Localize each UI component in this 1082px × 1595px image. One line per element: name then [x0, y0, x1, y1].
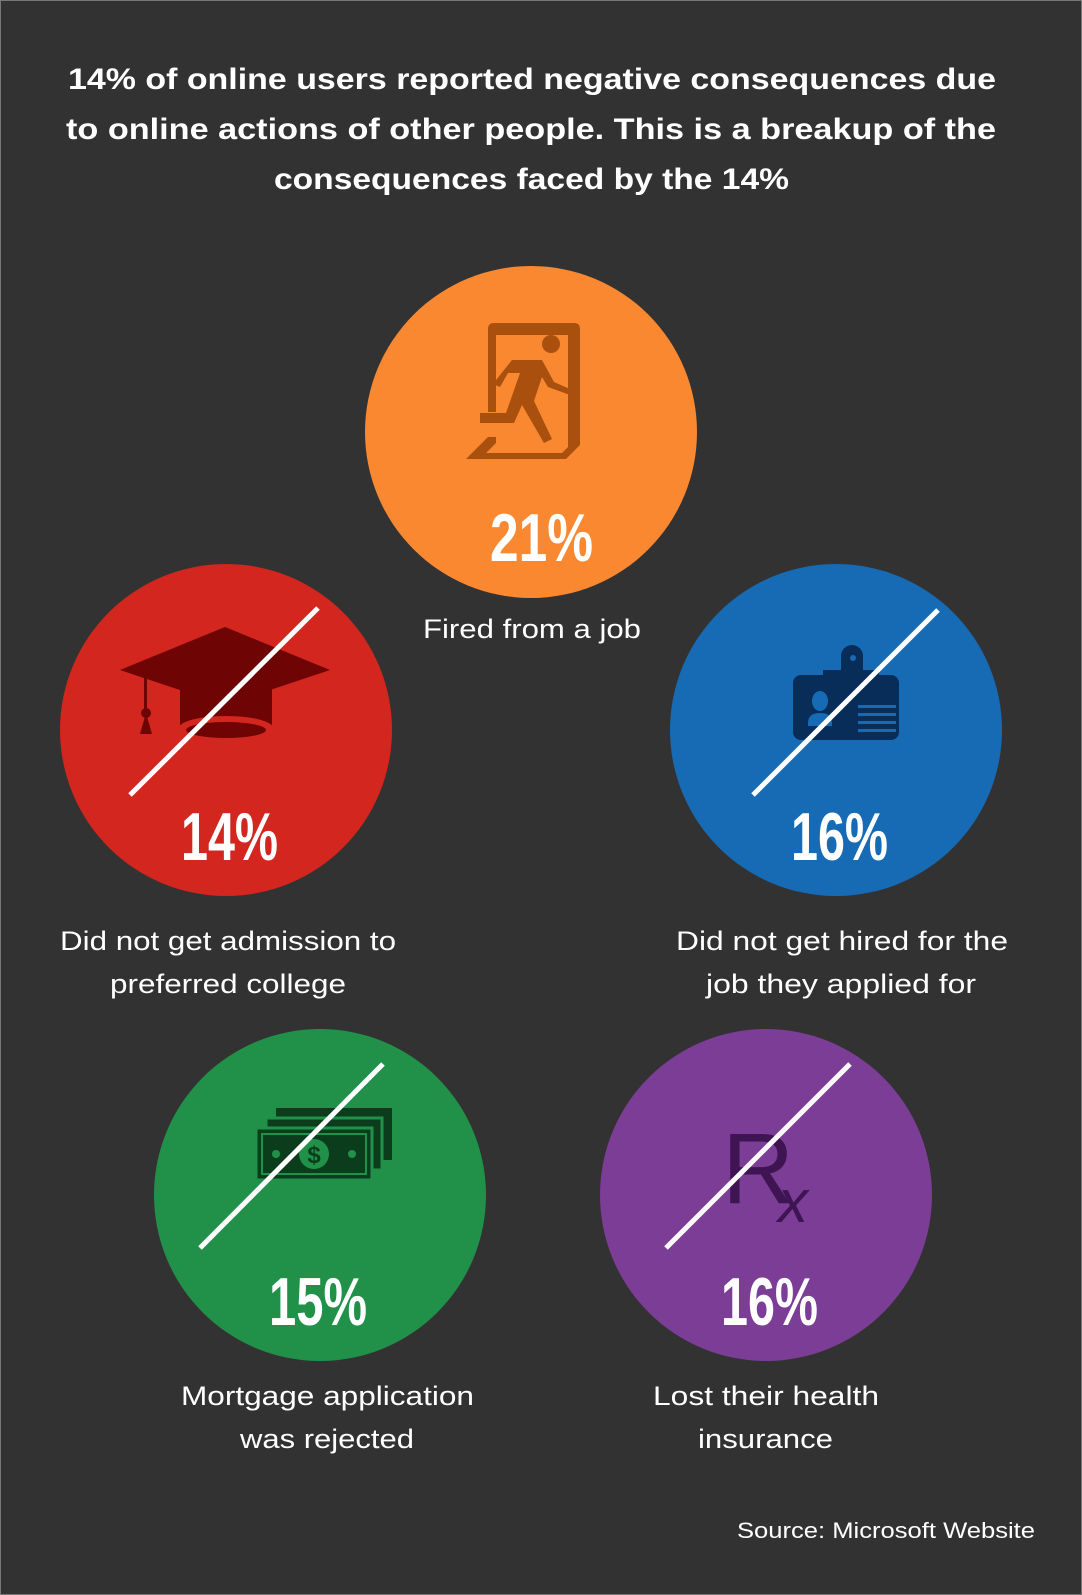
- label: hired: Did not get hired for the: [676, 926, 1008, 956]
- title: consequences faced by the 14%: [274, 163, 789, 196]
- panel: fired from a job: [365, 266, 697, 598]
- panel: health insurance: [600, 1029, 932, 1361]
- label: college: [60, 926, 396, 999]
- title: to online actions of other people. This is a breakup of the: [66, 113, 996, 146]
- panel: health insurance: 16%: [721, 1264, 818, 1340]
- label: health: insurance: [698, 1424, 833, 1454]
- panel: fired from a job: 21%: [490, 500, 593, 576]
- label: hired: job they applied for: [705, 969, 976, 999]
- icon: money stack: $: [307, 1142, 321, 1169]
- label: mortgage: was rejected: [239, 1424, 414, 1454]
- panel: health insurance: x: [775, 1168, 810, 1235]
- icon: id badge: [793, 645, 899, 740]
- label: health: [653, 1381, 879, 1454]
- panel: mortgage: [154, 1029, 486, 1361]
- title: [66, 63, 996, 196]
- panel: not hired: 16%: [791, 799, 888, 875]
- label: hired: [676, 926, 1008, 999]
- icon: Rx: R: [722, 1113, 794, 1225]
- label: college: Did not get admission to: [60, 926, 396, 956]
- label: mortgage: [181, 1381, 474, 1454]
- label: fired: Fired from a job: [423, 614, 641, 644]
- panel: college admission: 14%: [181, 799, 278, 875]
- icon: exit door runner: [466, 323, 580, 459]
- icon: money stack: [256, 1108, 392, 1180]
- panel: not hired: [670, 564, 1002, 896]
- icon: graduation cap: [120, 627, 330, 740]
- source: Source: Microsoft Website: [737, 1518, 1035, 1543]
- label: college: preferred college: [110, 969, 346, 999]
- title: 14% of online users reported negative consequences due: [68, 63, 996, 96]
- panel: mortgage: 15%: [269, 1264, 367, 1340]
- label: mortgage: Mortgage application: [181, 1381, 474, 1411]
- panel: college admission: [60, 564, 392, 896]
- label: health: Lost their health: [653, 1381, 879, 1411]
